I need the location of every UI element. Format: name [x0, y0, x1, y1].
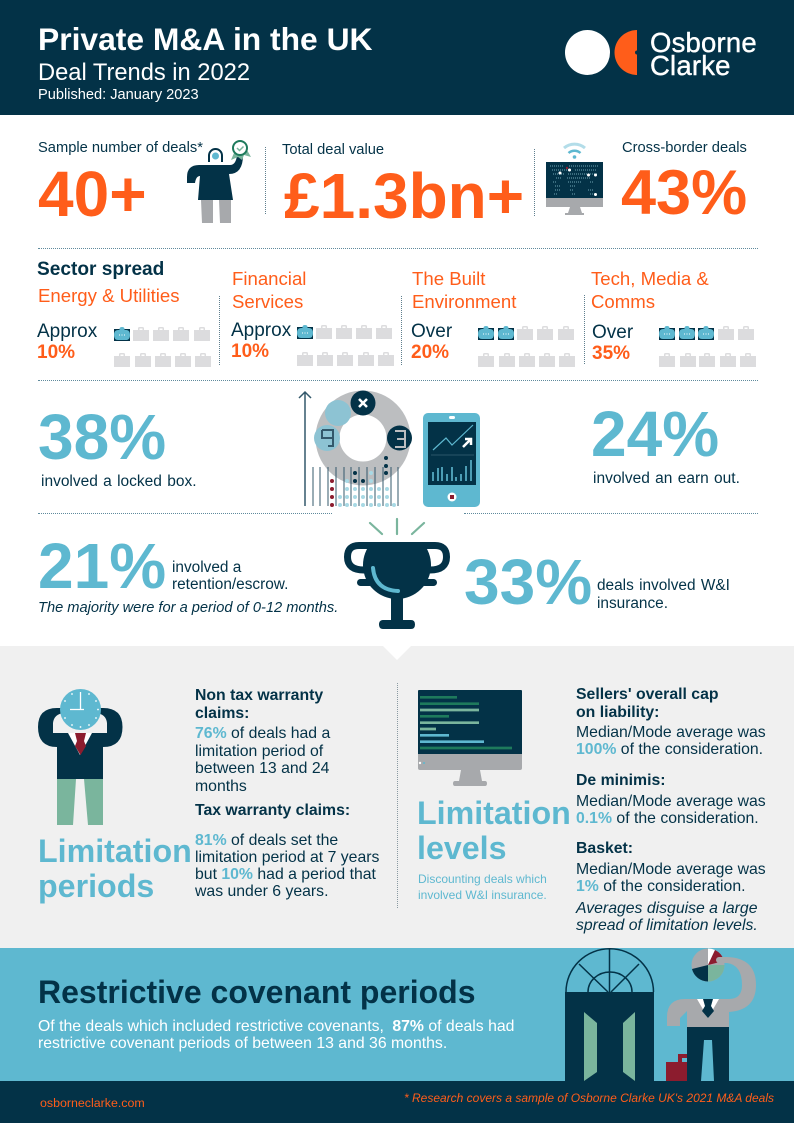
heading: limitation levels — [417, 795, 571, 866]
divider — [464, 513, 758, 514]
text: sellers' cap: 100% of the consideration. — [576, 741, 763, 758]
text: non tax warranty claims: months — [195, 778, 247, 794]
text: basket: 1% of the consideration. — [576, 878, 746, 895]
sector: energy and utilities: 10% — [37, 342, 75, 362]
text: restrictive covenant detail — [38, 1018, 514, 1052]
sector: financial services — [231, 268, 394, 366]
stat: total deal value: Total deal value — [282, 142, 384, 158]
stat: locked box: involved a locked box. — [41, 473, 197, 490]
stat: retention or escrow: retention/escrow. — [172, 576, 288, 593]
text: de minimis: Median/Mode average was — [576, 793, 766, 810]
sector: the built environment — [411, 268, 575, 367]
divider — [534, 149, 535, 216]
icon: monitor with world map and wifi — [546, 142, 603, 215]
stat: earn out — [591, 398, 740, 487]
icon: clock-headed man — [38, 689, 122, 825]
text: basket: Median/Mode average was — [576, 861, 766, 878]
heading: restrictive covenant periods: Restrictive covenant periods — [38, 974, 475, 1010]
sector: the built environment: Environment — [412, 291, 516, 312]
published date: Published: January 2023 — [38, 87, 199, 103]
stat: total deal value: £1.3bn+ — [284, 160, 524, 232]
stat: retention or escrow: 21% — [38, 530, 166, 602]
text: tax warranty claims: but 10% had a period that — [195, 866, 376, 883]
icon: man with rosette — [187, 140, 251, 223]
text: restrictive covenant detail: Of the deals which included restrictive covenants, 87% of deals had — [38, 1018, 514, 1035]
heading: limitation periods: Limitation — [38, 833, 192, 869]
sector: the built environment: The Built — [412, 268, 485, 289]
divider — [219, 296, 220, 365]
sector: the built environment: Over — [411, 321, 452, 342]
sector: energy and utilities: Approx — [37, 321, 97, 342]
divider — [401, 296, 402, 365]
text: tax warranty claims: Tax warranty claims: — [195, 802, 350, 819]
sector: tech, media and comms: Comms — [591, 291, 655, 312]
sector: tech, media and comms — [591, 268, 756, 367]
text: restrictive covenant detail: restrictive covenant periods of between 13 and 36 months. — [38, 1035, 447, 1052]
text: tax warranty claims: 81% of deals set the — [195, 832, 338, 849]
footer url: osborneclarke.com — [40, 1096, 145, 1110]
logo: Clarke — [650, 50, 731, 80]
text: sellers' cap: Median/Mode average was — [576, 724, 766, 741]
text: sellers' cap: on liability: — [576, 704, 659, 720]
icon: trophy — [344, 518, 450, 629]
text: tax warranty claims: was under 6 years. — [195, 883, 328, 900]
text: de minimis: De minimis: — [576, 772, 666, 789]
stat: locked box: 38% — [38, 401, 166, 473]
text: basket: Averages disguise a large — [576, 900, 758, 917]
text: non tax warranty claims — [195, 687, 330, 794]
text: non tax warranty claims: Non tax warranty — [195, 687, 323, 704]
logo: Osborne — [650, 27, 757, 58]
text: tax warranty claims: limitation period at 7 years — [195, 849, 379, 866]
stat: earn out: involved an earn out. — [593, 470, 740, 487]
stat: w&i insurance: insurance. — [597, 595, 668, 612]
note: discounting w&i — [418, 872, 547, 902]
stat: sample number of deals: 40+ — [38, 158, 147, 230]
header band — [0, 0, 794, 115]
sector: financial services: Financial — [232, 268, 306, 289]
text: basket: Basket: — [576, 840, 633, 857]
note: discounting w&i: Discounting deals which — [418, 872, 547, 886]
stat: earn out: 24% — [591, 398, 719, 470]
text: de minimis: 0.1% of the consideration. — [576, 810, 759, 827]
text: sellers' cap — [576, 686, 766, 758]
heading: limitation periods: periods — [38, 868, 154, 904]
sector: energy and utilities — [37, 285, 211, 367]
heading: sector spread: Sector spread — [37, 259, 164, 280]
stat: retention or escrow — [38, 530, 338, 616]
panel: limitations — [0, 646, 794, 948]
stat: w&i insurance — [464, 546, 730, 618]
text: non tax warranty claims: between 13 and 24 — [195, 760, 329, 777]
divider — [38, 513, 332, 514]
divider — [397, 683, 398, 908]
icon: monitor with bars — [418, 690, 522, 786]
sector: energy and utilities: Energy & Utilities — [38, 285, 180, 306]
sector: financial services: 10% — [231, 340, 269, 362]
title: Private M&A in the UK — [38, 21, 373, 57]
stat: sample number of deals — [38, 140, 203, 230]
divider — [265, 147, 266, 214]
logo — [565, 27, 757, 80]
footer band — [0, 1081, 794, 1123]
text: basket — [575, 840, 766, 934]
panel: restrictive covenant periods — [0, 948, 794, 1081]
sector: tech, media and comms: 35% — [592, 342, 630, 364]
sector: financial services: Approx — [231, 320, 291, 341]
sector: tech, media and comms: Tech, Media & — [591, 268, 709, 289]
divider — [38, 248, 758, 249]
text: non tax warranty claims: limitation period of — [195, 742, 323, 760]
stat: retention or escrow: involved a — [172, 559, 241, 576]
stat: locked box — [38, 401, 197, 490]
subtitle: Deal Trends in 2022 — [38, 60, 250, 86]
text: de minimis — [576, 772, 766, 827]
text: non tax warranty claims: 76% of deals had a — [195, 725, 330, 742]
divider — [584, 295, 585, 364]
icon: charts ring and tablet — [298, 390, 480, 507]
heading: limitation periods — [38, 833, 192, 904]
text: basket: spread of limitation levels. — [576, 917, 758, 934]
stat: retention or escrow: The majority were for a period of 0-12 months. — [38, 600, 338, 616]
sector: tech, media and comms: Over — [592, 322, 633, 343]
text: sellers' cap: Sellers' overall cap — [576, 686, 719, 703]
divider — [38, 380, 758, 381]
heading: limitation levels: Limitation — [417, 795, 571, 831]
illustration: door and businessman — [565, 948, 756, 1081]
text: tax warranty claims — [195, 802, 379, 900]
heading: limitation levels: levels — [417, 830, 506, 866]
stat: cross-border deals: 43% — [621, 158, 747, 228]
sector: the built environment: 20% — [411, 342, 449, 362]
notch — [383, 646, 411, 660]
sector: financial services: Services — [232, 291, 303, 312]
stat: w&i insurance: deals involved W&I — [597, 577, 730, 594]
text: non tax warranty claims: claims: — [195, 704, 249, 722]
footnote: * Research covers a sample of Osborne Clarke UK's 2021 M&A deals — [404, 1091, 774, 1105]
stat: sample number of deals: Sample number of deals* — [38, 140, 203, 156]
stat: cross-border deals: Cross-border deals — [622, 140, 747, 156]
stat: w&i insurance: 33% — [464, 546, 592, 618]
note: discounting w&i: involved W&I insurance. — [418, 888, 547, 902]
